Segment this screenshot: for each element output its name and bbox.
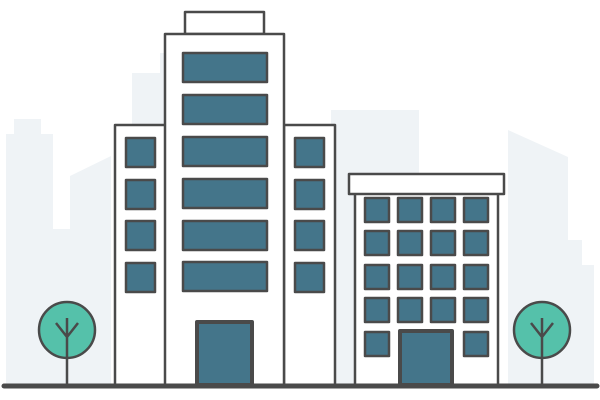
roof box: [185, 12, 264, 34]
tree right: [514, 302, 570, 385]
tower door: [197, 322, 252, 385]
tower body: [165, 34, 284, 385]
ground line: [4, 384, 597, 388]
tree left: [39, 302, 95, 385]
building: right office: [349, 174, 504, 385]
tower windows: [126, 53, 324, 292]
right wing: [284, 125, 335, 385]
building: tall tower: [115, 12, 335, 385]
left wing: [115, 125, 166, 385]
office door: [400, 331, 452, 385]
